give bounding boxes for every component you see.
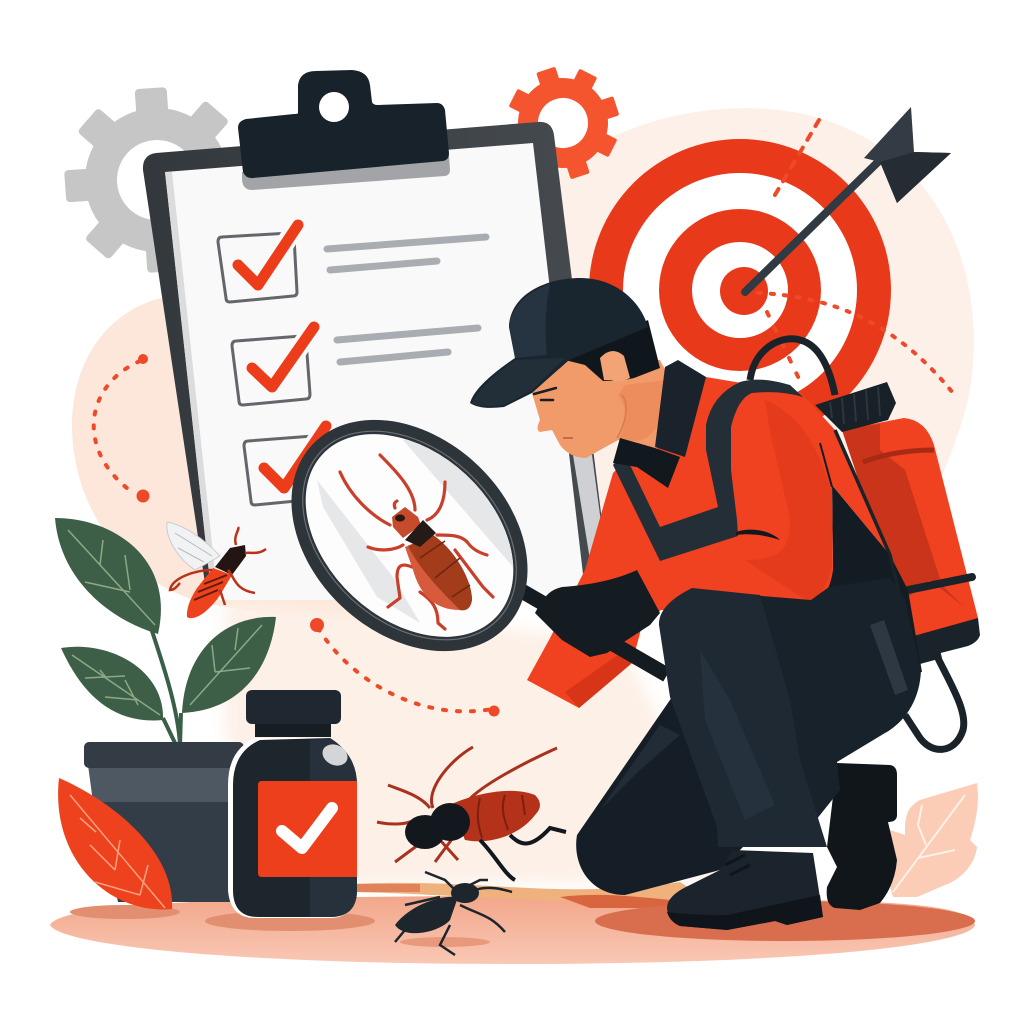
dotted trajectories [94,120,957,714]
elbow crease [736,530,780,540]
flying bug [167,522,266,618]
lens glare [317,440,514,623]
magnifying glass [292,420,667,682]
hips [690,578,921,840]
handle [520,590,667,675]
cap [470,278,648,408]
large cockroach [377,747,566,880]
orange gear [492,52,634,194]
label check [282,808,332,848]
small black ant [395,872,512,955]
clipboard clip [238,70,450,190]
strap edge [835,430,910,640]
hair [565,320,660,381]
torso and arm [527,377,910,708]
hose loop [905,650,964,749]
technician head [470,278,706,488]
orange leaf [58,778,172,909]
leaf one [55,518,161,634]
leg highlight [700,650,775,820]
target [589,139,891,441]
ground [50,882,975,964]
eye and brow [534,388,556,400]
calf highlight [600,725,680,810]
infographic illustration [50,67,980,964]
checklist row 3 [244,426,326,505]
arrow [745,107,951,292]
technician legs [576,578,921,930]
stem [150,625,181,745]
clipboard [143,70,606,600]
collar [655,360,706,457]
near leg [659,588,827,847]
pot [84,742,244,902]
backpack tank [750,339,980,664]
leaf two [61,647,163,720]
glove [535,570,660,657]
neck and face [532,360,668,458]
checklist row 2 [232,327,478,405]
sleeve shading [745,400,832,603]
back slit [820,443,832,487]
background blobs [72,108,974,885]
bottle [228,690,357,918]
bottle label [258,781,357,877]
leaf three [182,617,276,713]
pale leaf right [884,783,978,897]
magnified cockroach [340,455,493,629]
backpack frame [815,485,922,680]
checklist row 1 [218,223,486,302]
lower calf [576,697,790,895]
ear [600,351,630,382]
side pocket [870,620,908,695]
gray gear [59,82,255,278]
rear boot [827,763,897,910]
mouth [563,437,573,439]
harness strap [613,380,803,561]
front boot [667,850,823,930]
plant [55,518,276,745]
